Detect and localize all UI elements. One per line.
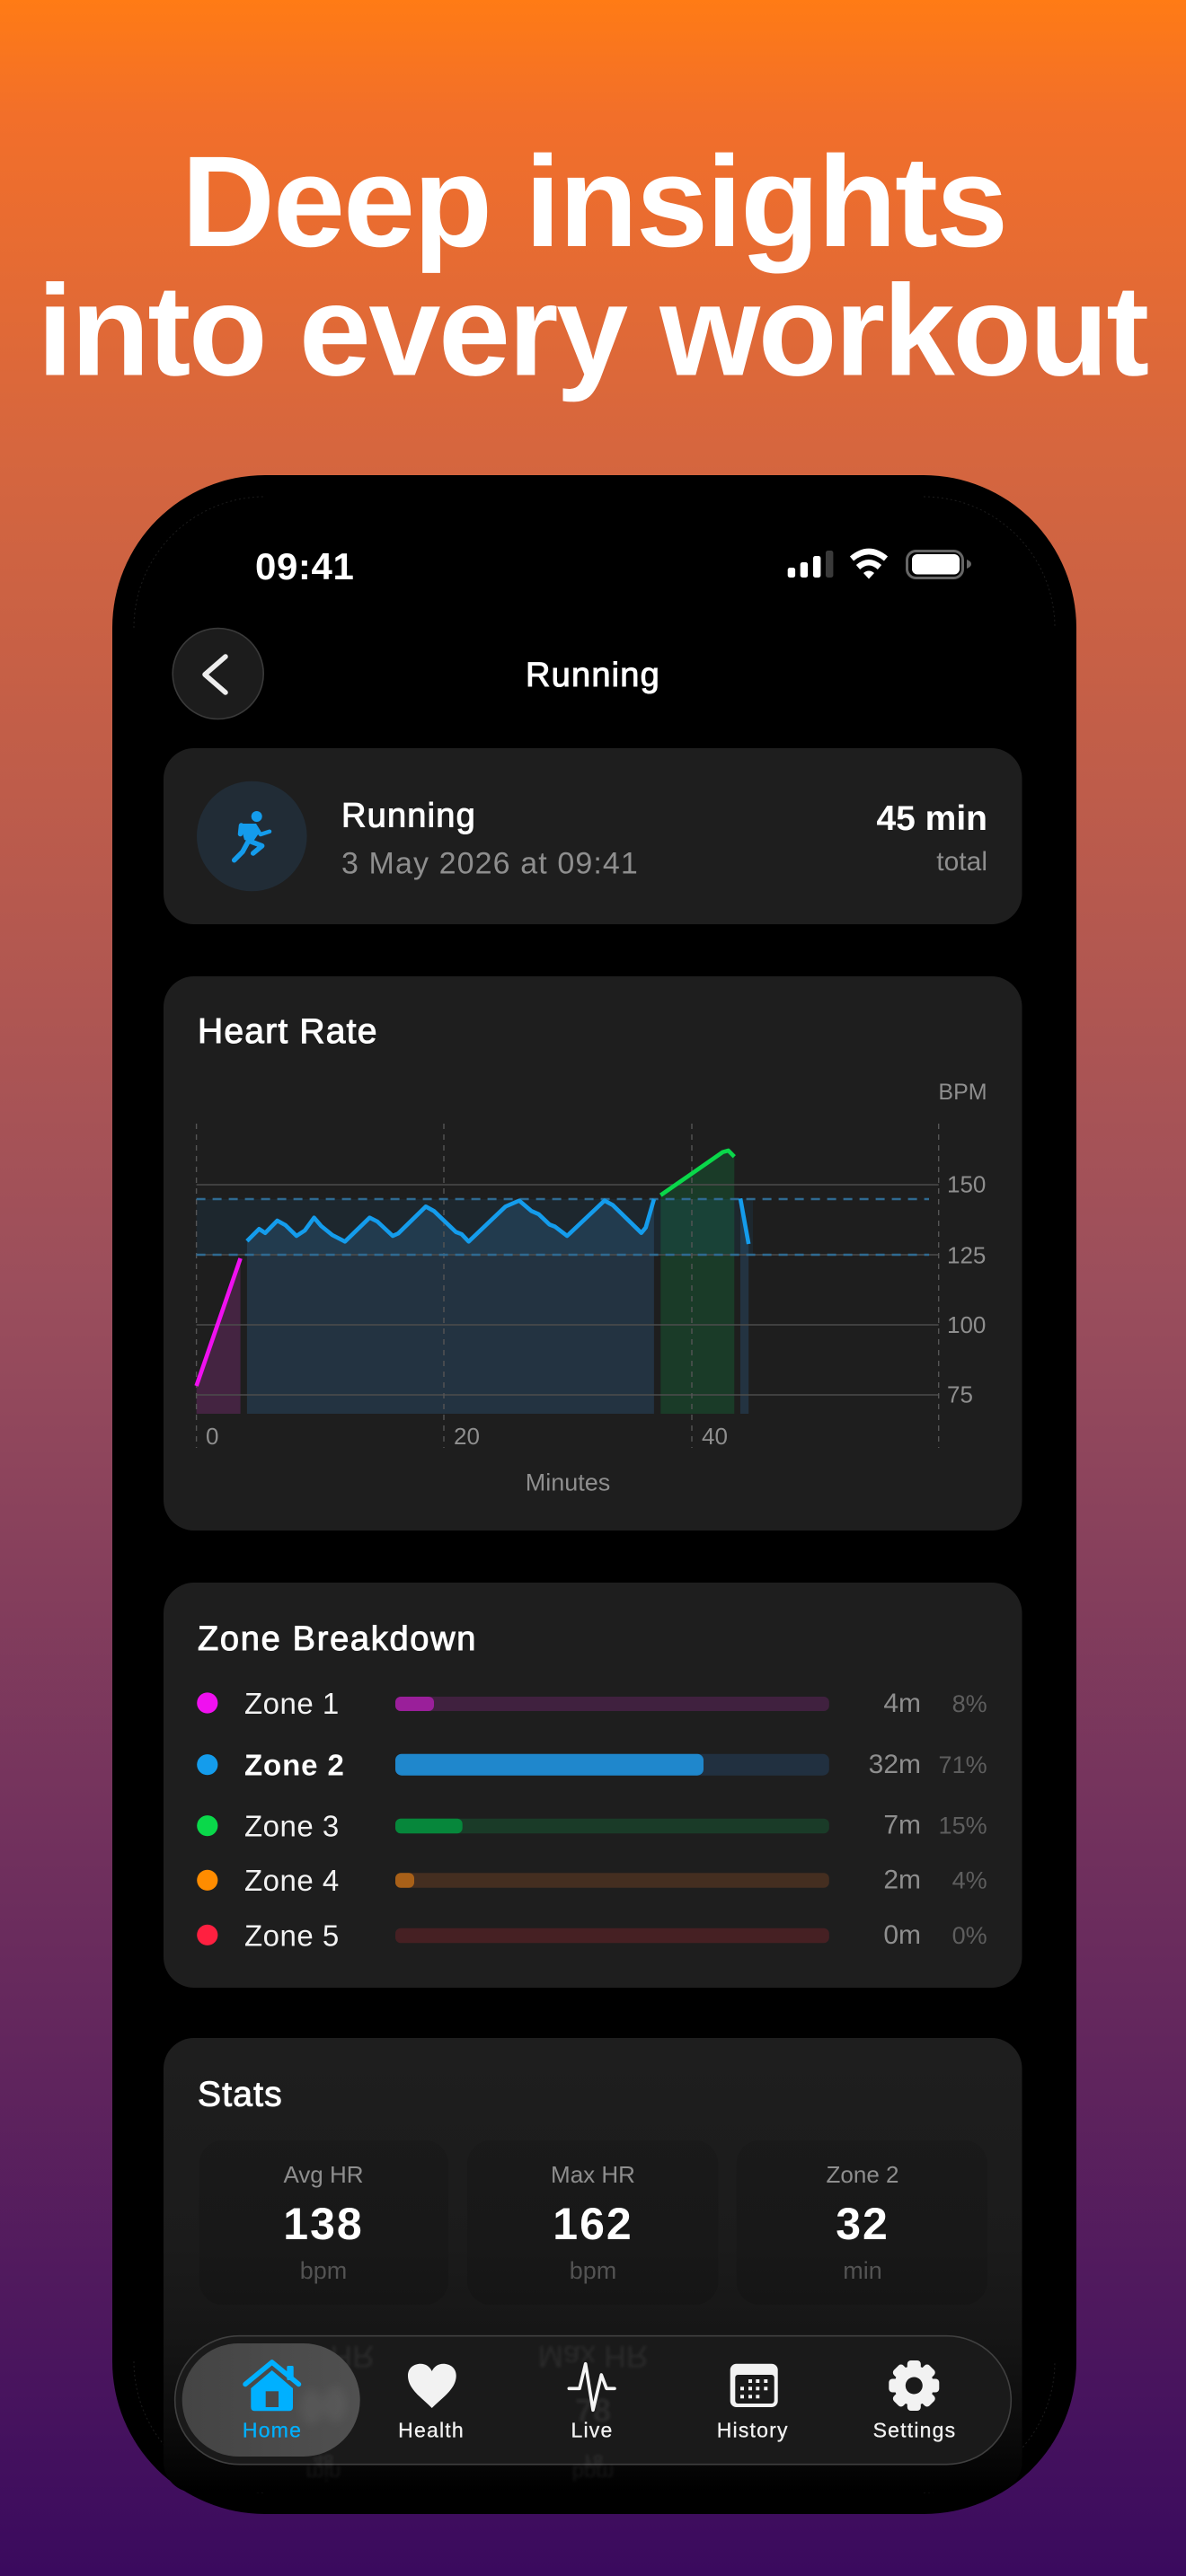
zone 2 row: 71% [939, 1751, 987, 1778]
zone 5 row: 0% [952, 1922, 987, 1949]
workout name: Running [341, 798, 476, 835]
x axis labels [206, 1423, 728, 1495]
tab: health: Health [398, 2418, 465, 2441]
target zone band [197, 1199, 753, 1255]
stat: maximum heart rate: 162 [553, 2199, 633, 2249]
stat: zone 2 minutes: min [843, 2257, 882, 2284]
zone 2 row: Zone 2 [244, 1749, 345, 1782]
title: into every workout [37, 259, 1148, 402]
zone 2 row [197, 1749, 987, 1782]
tab: live: Live [571, 2418, 613, 2441]
blurred content reflection [272, 2339, 648, 2484]
zone 4 row: 2m [883, 1866, 921, 1895]
stat: average heart rate: Avg HR [283, 2161, 364, 2188]
blurred content reflection: Max HR [538, 2339, 648, 2373]
title [37, 129, 1148, 402]
icon: pulse line [569, 2364, 615, 2410]
phone frame [112, 475, 1076, 2514]
zone 3 row [197, 1809, 987, 1842]
y axis labels: 150 [947, 1171, 986, 1198]
zone 1 row: Zone 1 [244, 1687, 340, 1720]
status time: 09:41 [255, 545, 354, 587]
icon: wifi [852, 551, 886, 578]
y axis labels: 100 [947, 1311, 986, 1338]
status bar [255, 545, 971, 587]
stat: zone 2 minutes: Zone 2 [827, 2161, 898, 2188]
stat: maximum heart rate: bpm [570, 2257, 616, 2284]
x axis labels: Minutes [526, 1469, 610, 1495]
title: Deep insights [181, 129, 1006, 274]
zone 4 row [197, 1864, 987, 1897]
y axis labels: 75 [947, 1381, 973, 1408]
stat: average heart rate: bpm [300, 2257, 347, 2284]
zone 5 row [197, 1919, 987, 1953]
icon: heart [408, 2364, 456, 2408]
stat: maximum heart rate [467, 2140, 718, 2305]
tab: home active [182, 2343, 360, 2457]
nav title: Running [526, 657, 660, 694]
y axis labels [938, 1080, 987, 1408]
zone 5 row: 0m [883, 1920, 921, 1950]
x axis labels: 20 [454, 1423, 480, 1450]
stat: maximum heart rate: Max HR [551, 2161, 635, 2188]
y axis labels: 125 [947, 1242, 986, 1269]
tab: health [398, 2364, 465, 2441]
heading: heart rate: Heart Rate [198, 1012, 378, 1051]
x axis labels: 0 [206, 1423, 218, 1450]
zone 1 row: 4m [883, 1689, 921, 1718]
zone 1 row: 8% [952, 1690, 987, 1717]
heading: zone breakdown: Zone Breakdown [198, 1620, 477, 1658]
stat: average heart rate [199, 2140, 448, 2305]
grid lines [197, 1124, 939, 1448]
heading: stats: Stats [198, 2076, 283, 2114]
blurred content reflection: 78 [583, 2450, 603, 2470]
tab bar [175, 2336, 1011, 2484]
duration: 45 min [876, 799, 987, 838]
blurred content reflection: 78 [575, 2392, 611, 2429]
zone 2 row: 32m [869, 1750, 921, 1779]
panel: zone breakdown [164, 1583, 1022, 1988]
panel: heart rate [164, 976, 1022, 1531]
blurred content reflection: Min HR [272, 2339, 375, 2373]
blurred content reflection: bpm [572, 2460, 614, 2484]
chart area fills [197, 1151, 748, 1414]
icon: battery [907, 551, 971, 578]
icon: calendar [730, 2364, 778, 2407]
panel: workout summary [164, 748, 1022, 924]
zone 3 row: Zone 3 [244, 1809, 340, 1842]
y axis labels: BPM [938, 1080, 987, 1105]
zone 4 row: Zone 4 [244, 1864, 340, 1897]
tab: live [569, 2364, 615, 2441]
panel: stats [164, 2038, 1022, 2492]
tab: settings: Settings [873, 2418, 956, 2441]
tab: home active: Home [243, 2418, 302, 2441]
target zone dashed limits [197, 1199, 929, 1255]
stat: zone 2 minutes: 32 [836, 2199, 890, 2249]
stat: average heart rate: 138 [283, 2199, 364, 2249]
duration caption: total [936, 847, 987, 877]
tab: settings [873, 2360, 956, 2441]
heart rate line [197, 1151, 748, 1386]
x axis labels: 40 [702, 1423, 728, 1450]
back button [173, 629, 263, 719]
zone 3 row: 7m [883, 1811, 921, 1840]
icon: gear [889, 2360, 939, 2411]
blurred content reflection: 48 [314, 2450, 333, 2470]
chart: heart rate over time [197, 1080, 987, 1495]
zone 4 row: 4% [952, 1867, 987, 1894]
zone 5 row: Zone 5 [244, 1919, 340, 1953]
blurred content reflection: min [306, 2460, 341, 2484]
icon: runner [197, 781, 307, 891]
workout date: 3 May 2026 at 09:41 [341, 847, 639, 881]
tab: history [717, 2364, 789, 2441]
tab: history: History [717, 2418, 789, 2441]
zone 1 row [197, 1687, 987, 1720]
icon: house [245, 2362, 298, 2411]
stat: zone 2 minutes [737, 2140, 987, 2305]
zone 3 row: 15% [939, 1813, 987, 1839]
icon: signal bars [788, 551, 833, 578]
